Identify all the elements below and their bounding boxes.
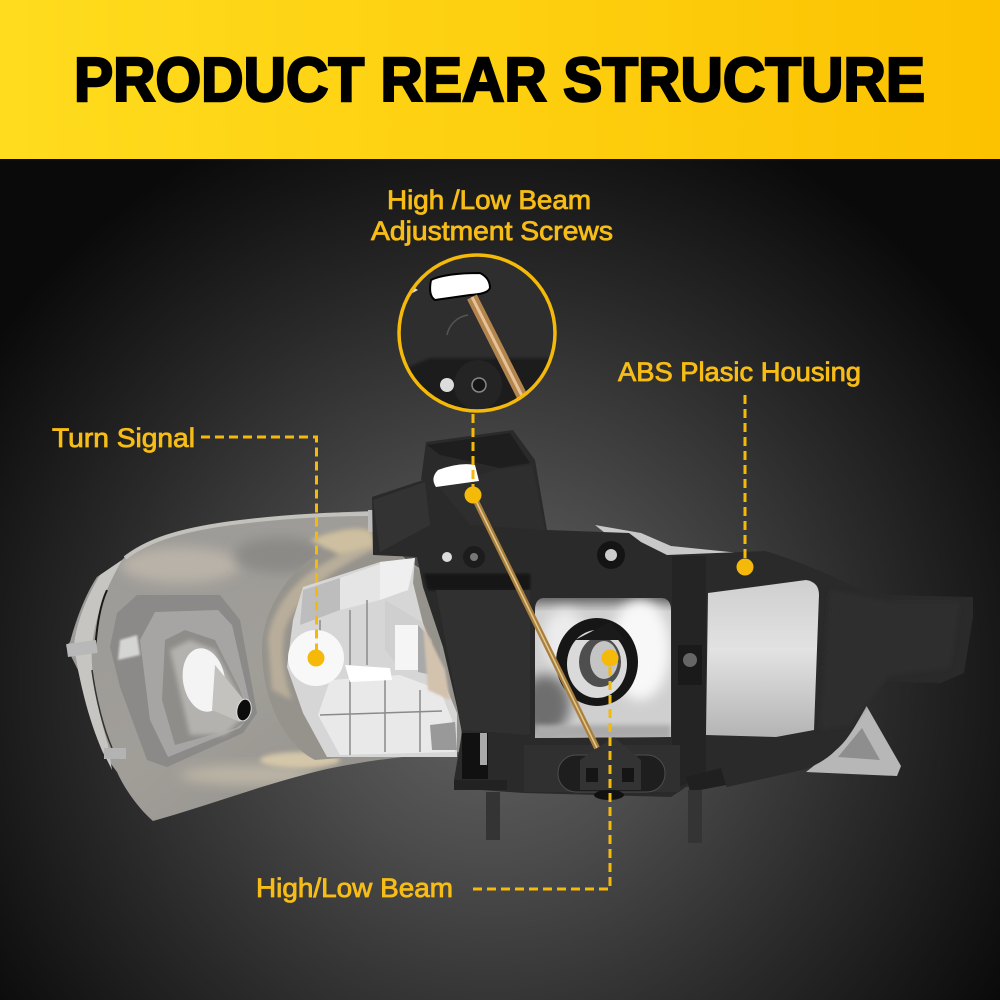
silver reflector — [287, 558, 457, 757]
housing screws — [442, 541, 702, 685]
callout: turn signal — [52, 423, 324, 666]
lens clip top — [368, 510, 377, 532]
lens soft highlights — [120, 547, 240, 583]
detail circle: adjustment screw close-up — [390, 255, 560, 420]
adjustment rod — [473, 495, 597, 748]
callout label — [371, 185, 613, 246]
callout: adjustment screws — [371, 185, 613, 504]
callout label: Adjustment Screws — [371, 216, 613, 246]
white adjuster knob — [433, 464, 479, 487]
title: PRODUCT REAR STRUCTURE — [74, 46, 925, 115]
bottom clip — [104, 748, 126, 759]
rear lens tip on right — [806, 705, 901, 776]
left reflector cup — [110, 595, 257, 767]
callout: high/low beam: High/Low Beam — [256, 873, 453, 903]
mounting foot left — [486, 792, 500, 840]
white bulb cap — [288, 630, 344, 686]
bulb hole — [235, 698, 253, 722]
tan tint — [423, 625, 450, 700]
right housing window — [706, 580, 819, 737]
upper lens strip behind housing — [595, 525, 740, 562]
callout label: High /Low Beam — [387, 185, 591, 215]
housing shading — [373, 433, 960, 792]
black plastic housing — [372, 430, 973, 797]
clear lens body — [66, 510, 470, 821]
bulb socket — [556, 618, 638, 706]
left clip — [66, 640, 98, 657]
callout: high/low beam — [256, 650, 618, 903]
socket cap white — [178, 645, 230, 715]
header banner — [0, 0, 1000, 159]
callout: housing: ABS Plasic Housing — [618, 357, 861, 387]
fuse box — [454, 733, 507, 790]
window mould mark — [743, 605, 749, 665]
bulb window — [535, 598, 671, 738]
large round reflector rim — [262, 540, 440, 760]
lens top rim — [125, 514, 368, 558]
headlight product — [66, 430, 973, 843]
mounting foot right — [686, 768, 726, 843]
callout: turn signal: Turn Signal — [52, 423, 195, 453]
callout: housing — [618, 357, 861, 576]
lens serrated edge — [74, 560, 122, 770]
electrical connector — [558, 737, 665, 800]
